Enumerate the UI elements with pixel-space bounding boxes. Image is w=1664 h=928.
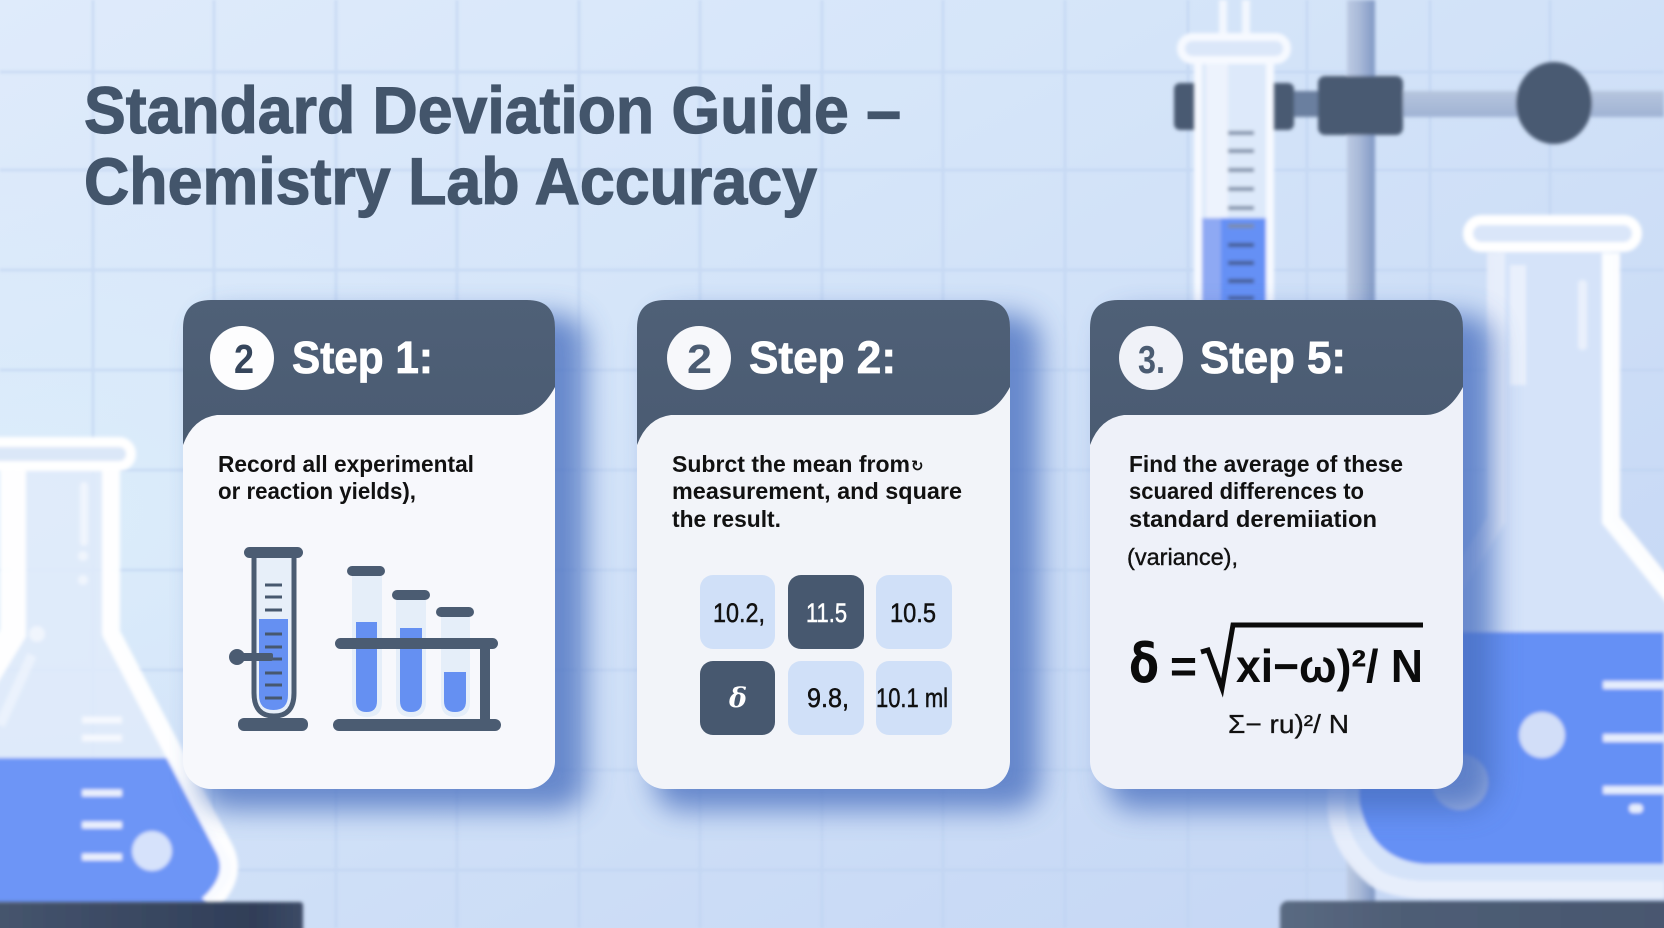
step 2 description: measurement, and square	[672, 478, 962, 504]
step 3 number badge: 3.	[1138, 339, 1165, 382]
data chips grid: 10.5	[890, 598, 936, 628]
panel: step 2	[637, 300, 1010, 789]
main formula	[1129, 625, 1423, 695]
step 1 description	[218, 451, 474, 504]
panel: step 1	[183, 300, 555, 789]
step 3 description: (variance),	[1127, 544, 1238, 570]
dark bench bases	[0, 901, 1664, 928]
panel: step 3	[1090, 300, 1463, 789]
step 3 description: Find the average of these	[1129, 451, 1403, 477]
icon: test tube rack	[333, 566, 501, 731]
lab stand with clamp	[1174, 0, 1664, 928]
step 2 description	[672, 451, 962, 532]
graduated cylinder in background	[1181, 0, 1287, 320]
step 2 description: Subrct the mean from	[672, 451, 910, 477]
step 2 number badge	[667, 326, 731, 390]
card shadows	[200, 314, 1493, 810]
main formula: xi−ω)²/ N	[1236, 640, 1423, 692]
step 2 header band	[637, 300, 1010, 445]
conical flask left	[0, 442, 235, 910]
main formula: δ	[1129, 632, 1159, 695]
step 3 heading: Step 5:	[1200, 332, 1346, 383]
data chips grid: δ	[728, 683, 747, 714]
step 2 number badge: 2	[687, 336, 712, 382]
step 3 description: standard deremiiation	[1129, 506, 1377, 532]
conical flask right	[1334, 220, 1664, 897]
secondary formula: Σ− ru)²/ N	[1228, 709, 1349, 739]
title	[84, 73, 901, 218]
step 1 header band	[183, 300, 555, 445]
step 2 description: ↻	[911, 457, 924, 475]
data chips grid	[700, 575, 952, 735]
title: Standard Deviation Guide –	[84, 73, 901, 147]
step 2 description: the result.	[672, 506, 781, 532]
step 1 heading: Step 1:	[292, 332, 433, 383]
data chips grid: 10.2,	[713, 598, 765, 628]
step 3 description	[1127, 451, 1403, 570]
data chips grid: 10.1 ml	[876, 683, 948, 713]
title: Chemistry Lab Accuracy	[84, 144, 817, 218]
icon: graduated cylinder	[229, 547, 308, 731]
step 1 description: or reaction yields),	[218, 478, 416, 504]
main formula: =	[1170, 640, 1197, 692]
step 3 number badge	[1119, 326, 1183, 390]
step 1 description: Record all experimental	[218, 451, 474, 477]
step 1 number badge	[210, 326, 274, 390]
step 2 heading: Step 2:	[749, 332, 896, 383]
data chips grid: 9.8,	[807, 683, 849, 713]
step 1 number badge: 2	[234, 336, 254, 382]
data chips grid: 11.5	[806, 598, 847, 628]
step 3 header band	[1090, 300, 1463, 445]
step 3 description: scuared differences to	[1129, 478, 1364, 504]
